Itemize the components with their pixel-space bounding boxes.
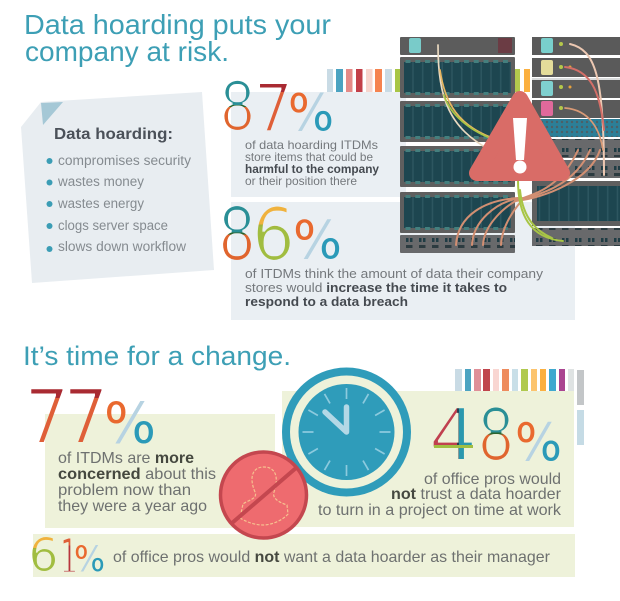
text: 86 percent description: respond to a data breach [245, 294, 408, 309]
text: 87 percent description: or their position there [245, 174, 357, 188]
text: 48 percent description: not trust a data hoarder [391, 486, 562, 503]
colour stripes top [327, 69, 530, 92]
text: 48 percent description: to turn in a project on time at work [318, 502, 562, 519]
text: 87 percent description: harmful to the company [245, 162, 379, 176]
title: data hoarding puts your company at risk: company at risk. [25, 36, 229, 67]
number 48%: 4 [429, 393, 477, 477]
note heading: Data hoarding: [54, 126, 173, 143]
text: 77 percent description: they were a year ago [58, 498, 207, 515]
text: 86 percent description [245, 266, 544, 309]
text: 87 percent description: of data hoarding ITDMs [245, 138, 378, 152]
number 48%: 8 [478, 393, 514, 477]
panel: 87 percent background [231, 92, 406, 197]
panel: data hoarding note card [21, 92, 214, 283]
number 86%: 8 [218, 192, 256, 278]
illustration: server racks [400, 37, 620, 253]
stat: 61 percent [32, 537, 550, 572]
stat: 86 percent [218, 192, 544, 309]
number 77% [24, 373, 156, 461]
panel: 77 percent background [45, 414, 275, 528]
number 48%: % [515, 414, 562, 474]
cables [438, 44, 604, 245]
icon: clock [282, 368, 411, 496]
right server rack [532, 37, 620, 246]
title: data hoarding puts your company at risk: Data hoarding puts your [24, 9, 331, 40]
note bullet list: clogs server space [58, 218, 168, 233]
note bullet list: slows down workflow [58, 239, 186, 254]
title: it's time for a change: It’s time for a change. [23, 341, 291, 371]
note bullet list [46, 153, 191, 254]
text: 77 percent description: of ITDMs are more [58, 450, 194, 467]
stat: 77 percent [24, 373, 216, 515]
number 87%: 7 [254, 70, 293, 147]
number 87%: 8 [220, 68, 256, 147]
number 61%: % [74, 540, 105, 580]
icon: no hoarder sign [220, 452, 306, 538]
panel: 86 percent background [231, 202, 575, 320]
number 86%: 6 [252, 193, 295, 278]
number 86% [218, 192, 342, 278]
number 77%: % [104, 392, 156, 456]
number 87% [220, 68, 334, 147]
number 61%: 1 [60, 528, 78, 586]
colour stripes right [455, 369, 584, 445]
number 61%: 6 [28, 528, 58, 582]
text: 61 percent description: of office pros would not want a data hoarder as their manager [113, 549, 551, 566]
stat: 87 percent [220, 68, 379, 188]
number 77%: 7 [24, 373, 70, 461]
text: 77 percent description: concerned about this [58, 466, 216, 483]
note bullet list: compromises security [58, 153, 191, 168]
number 86%: % [293, 210, 342, 272]
text: 86 percent description: of ITDMs think the amount of data their company [245, 266, 544, 281]
text: 87 percent description: store items that could be [245, 150, 373, 164]
text: 87 percent description [245, 138, 379, 188]
text: 48 percent description: of office pros would [424, 471, 561, 488]
text: 48 percent description [318, 471, 562, 519]
icon: warning triangle [477, 99, 562, 174]
number 48% [429, 393, 562, 477]
panel: 61 percent background [33, 534, 575, 577]
text: 77 percent description: problem now than [58, 482, 191, 499]
icon: folded corner [41, 102, 63, 125]
text: 77 percent description [58, 450, 216, 515]
note bullet list: wastes energy [57, 196, 144, 211]
number 77%: 7 [64, 373, 108, 461]
note bullet list: wastes money [57, 174, 144, 189]
number 61% [32, 537, 104, 572]
number 87%: % [288, 84, 334, 144]
text: 86 percent description: stores would increase the time it takes to [245, 280, 507, 295]
stat: 48 percent [318, 393, 562, 519]
title: data hoarding puts your company at risk [24, 9, 331, 67]
panel: 48 percent background [282, 391, 574, 527]
left server rack [400, 37, 515, 253]
